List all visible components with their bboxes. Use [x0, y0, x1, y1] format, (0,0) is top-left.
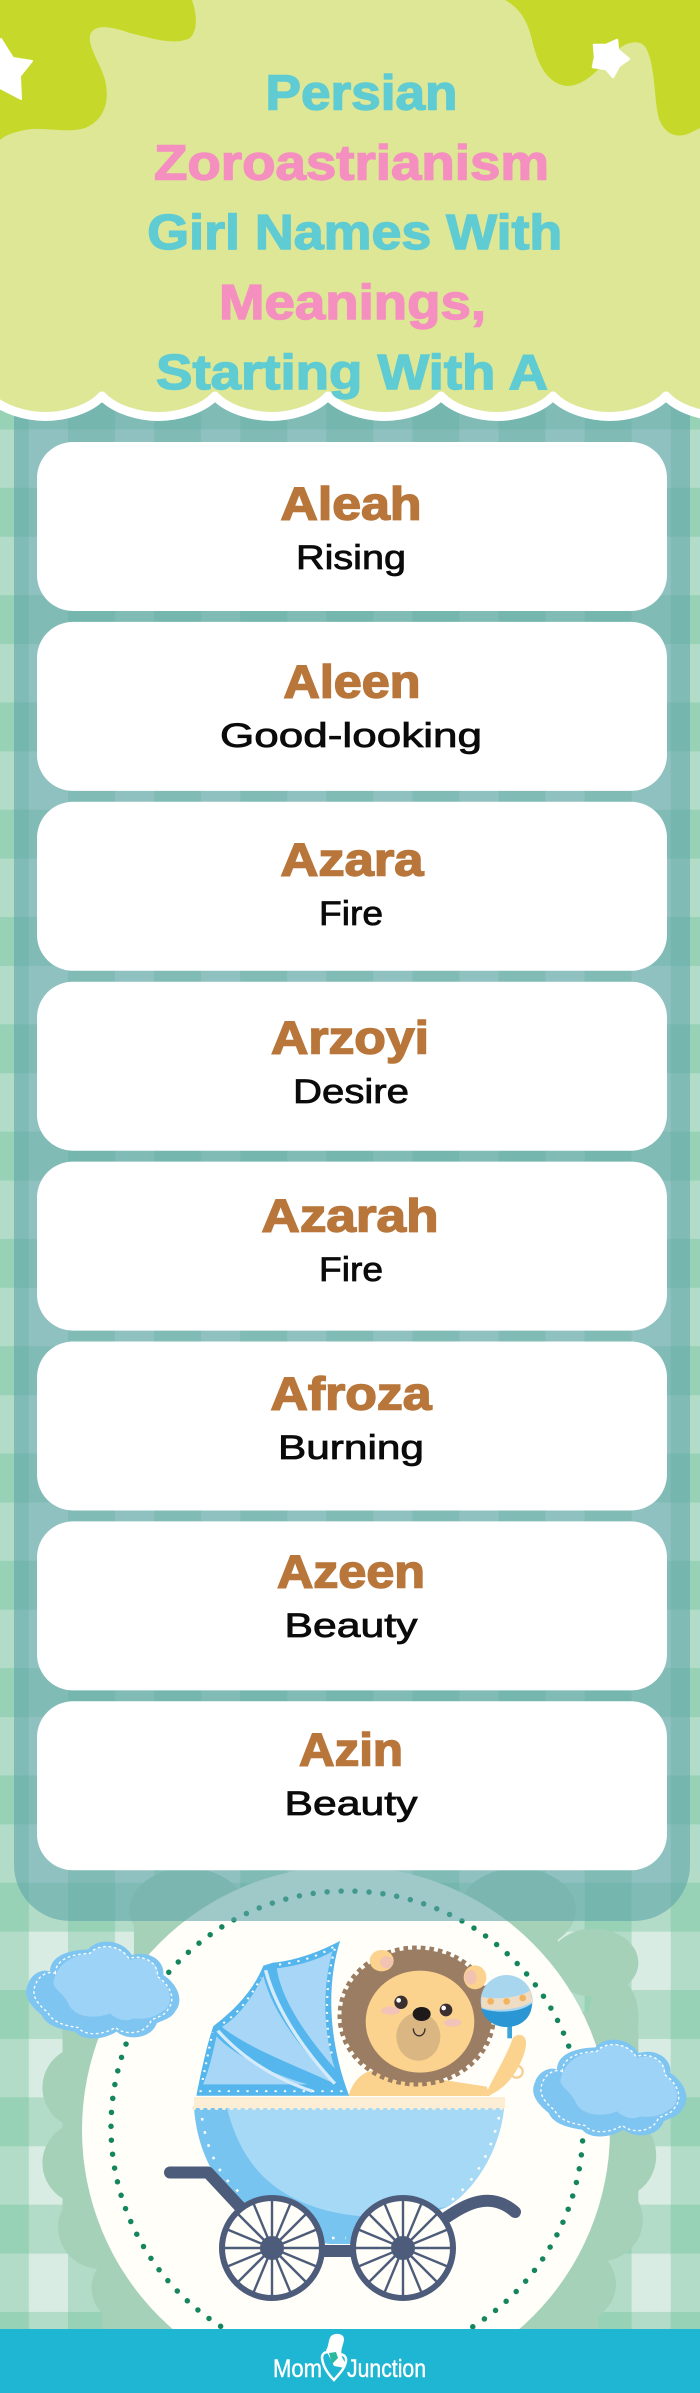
nose	[413, 2007, 431, 2021]
translucent teal panel behind the cards	[14, 300, 690, 1921]
card: Azara: Fire	[319, 895, 383, 933]
eyes	[394, 1996, 452, 2016]
icon: star right	[593, 40, 629, 77]
title: Starting With A	[156, 346, 548, 400]
logo wordmark: Mom	[273, 2355, 322, 2383]
pram handles and axle	[170, 2172, 515, 2251]
face	[366, 1971, 474, 2073]
card: Azarah: Azarah	[262, 1190, 438, 1242]
logo wordmark	[273, 2355, 426, 2383]
title: Meanings,	[219, 276, 486, 330]
cheeks	[381, 2007, 461, 2027]
pram canopy	[196, 1941, 349, 2096]
footer band	[0, 2329, 700, 2393]
card: Azarah	[37, 1162, 667, 1331]
card: Azin: Azin	[299, 1724, 403, 1776]
card: Afroza: Burning	[278, 1429, 424, 1467]
title	[147, 66, 562, 400]
card: Aleen	[37, 622, 667, 791]
card: Aleen: Aleen	[284, 656, 420, 708]
logo icon	[322, 2334, 346, 2380]
card: Arzoyi: Arzoyi	[271, 1012, 429, 1064]
icon: star left	[0, 39, 32, 99]
cream circle behind the pram	[82, 1866, 610, 2393]
title: Zoroastrianism	[154, 137, 549, 191]
card: Aleen: Good-looking	[220, 717, 482, 755]
cloud right	[533, 2040, 686, 2137]
logo wordmark: Junction	[347, 2355, 426, 2383]
mouth	[413, 2028, 425, 2036]
lion body	[348, 2070, 490, 2096]
card: Arzoyi: Desire	[293, 1073, 409, 1111]
rattle ring	[511, 2066, 523, 2078]
card: Azin: Beauty	[284, 1785, 418, 1823]
scalloped green backdrop behind the illustration	[42, 1868, 656, 2329]
name cards	[37, 442, 667, 1870]
lion	[340, 1948, 533, 2096]
card: Azarah: Fire	[319, 1251, 383, 1289]
ears	[370, 1950, 486, 1989]
title: Persian	[266, 66, 458, 120]
pram wheels	[222, 2198, 453, 2298]
card: Azin	[37, 1701, 667, 1870]
header lime blobs	[0, 0, 700, 140]
pram	[170, 1941, 515, 2298]
card: Afroza: Afroza	[270, 1368, 432, 1420]
title: Girl Names With	[147, 206, 562, 260]
card: Azara: Azara	[280, 834, 424, 886]
cloud left	[26, 1942, 179, 2039]
card: Aleah	[37, 442, 667, 611]
rattle	[481, 1975, 533, 2038]
pram basket	[194, 2097, 505, 2244]
card: Aleah: Aleah	[280, 478, 422, 530]
header scalloped banner	[0, 0, 700, 416]
card: Arzoyi	[37, 982, 667, 1151]
muzzle	[396, 2013, 440, 2061]
card: Azara	[37, 802, 667, 971]
MomJunction logo	[273, 2334, 426, 2383]
card: Azeen: Azeen	[277, 1546, 425, 1598]
card: Aleah: Rising	[296, 539, 406, 577]
dotted green ring	[111, 1891, 583, 2363]
mane	[340, 1948, 494, 2084]
card: Afroza	[37, 1342, 667, 1510]
card: Azeen	[37, 1521, 667, 1690]
card: Azeen: Beauty	[284, 1607, 418, 1645]
lion arm	[485, 2035, 526, 2096]
